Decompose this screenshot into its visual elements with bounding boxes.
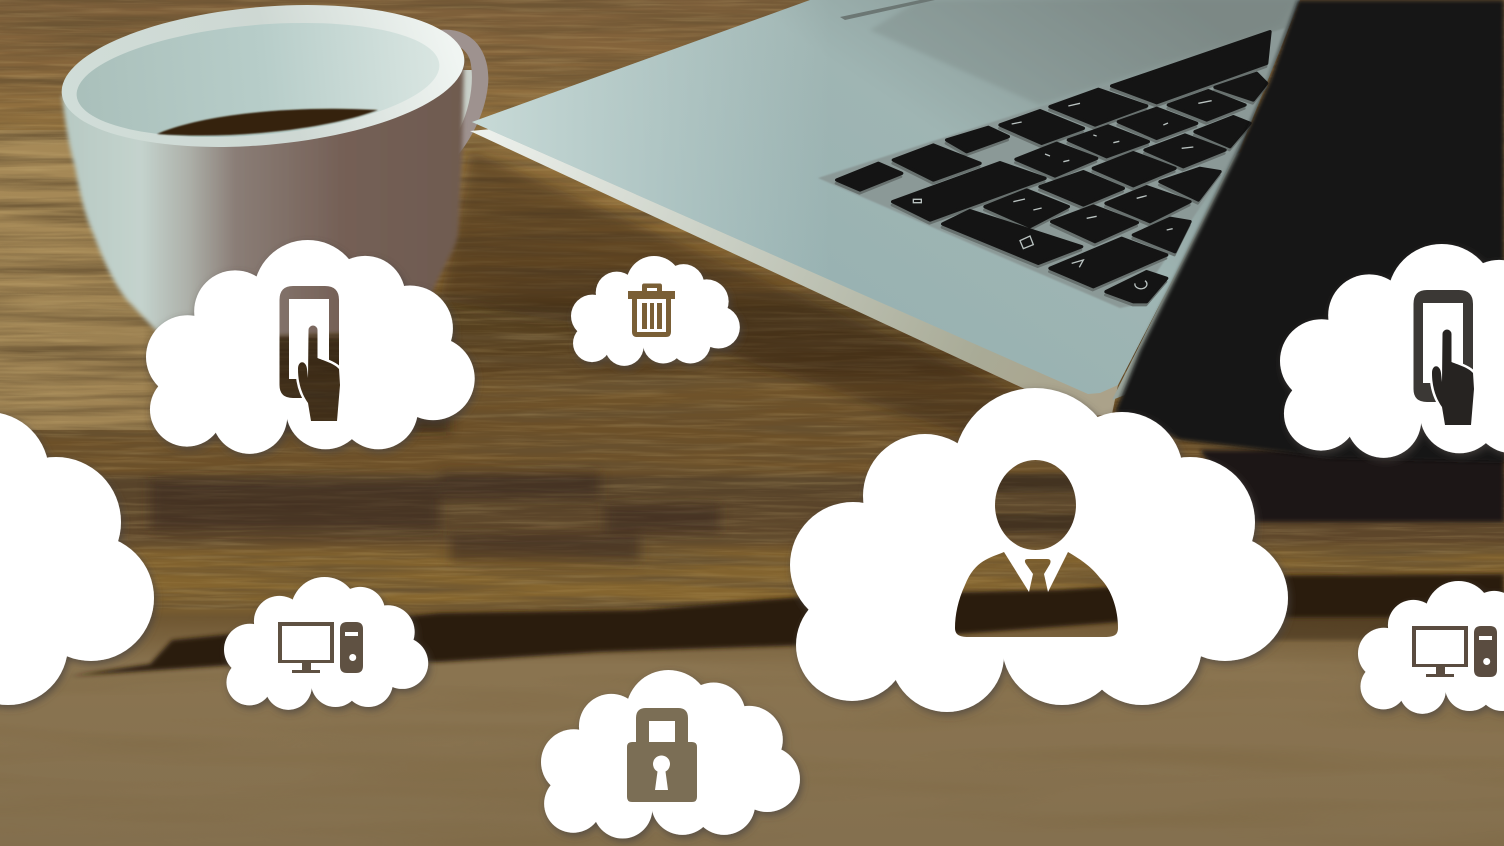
cloud: user profile, large [790,388,1288,712]
cloud shape [224,577,428,710]
dark crack between the planks [70,574,1504,676]
cloud shape [571,256,740,366]
icon: hand tapping phone [1414,290,1474,425]
keyboard well [818,28,1285,308]
icon: desktop computer [278,622,363,673]
cloud shape [1358,581,1504,714]
coffee cup [56,0,488,340]
head [995,460,1076,550]
icon: trash can [628,284,675,337]
icon: desktop computer [1412,626,1497,677]
cloud: desktop computer, right edge [1358,581,1504,714]
cloud: touch phone [146,240,475,454]
dark wood below the screen [1200,450,1504,522]
laptop base [470,0,1300,417]
cloud shape [790,388,1288,712]
cloud shape [146,240,475,454]
cloud: desktop computer [224,577,428,710]
icon: padlock [627,708,697,802]
cloud: left edge, no icon [0,388,154,712]
dark blurred patches in the plank [150,472,720,562]
cloud: touch phone, right edge [1280,244,1504,458]
cloud: trash [571,256,740,366]
laptop shadow on the wood [440,150,1090,440]
cloud: padlock [541,670,800,838]
laptop screen, dark [1115,0,1504,462]
cloud shape [1280,244,1504,458]
torso and tie [955,552,1118,637]
icon: person in suit and tie [955,460,1118,637]
icon: hand tapping phone [280,286,340,421]
keyboard keys [836,32,1270,305]
cloud shape [541,670,800,838]
